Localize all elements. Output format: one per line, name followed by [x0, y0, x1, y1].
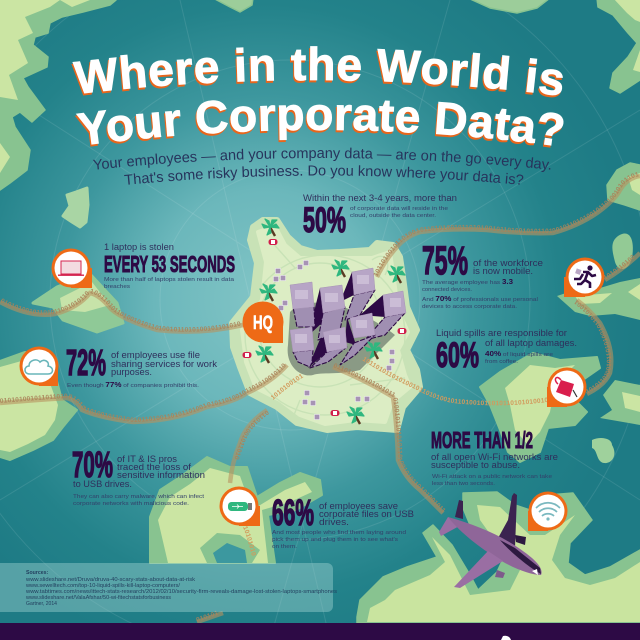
stat: Wi-Fi: Wi-Fi attack on a public network can take — [432, 474, 552, 480]
stat: 70% USB: sensitive information — [117, 470, 205, 480]
sources panel: www.slideshare.net/ValaAfshar/50-wi-fitechstatsforbusiness — [26, 595, 171, 601]
palm trees — [256, 219, 405, 424]
stat: 66% USB files: pick them up and plug them in to see what's — [272, 537, 398, 543]
stat: 72% file sharing: of employees use file — [111, 350, 200, 360]
stat: 75% mobile: And 70% of professionals use personal — [422, 296, 538, 303]
binary data trails: 1011010110101001011010100101101001011010110101010010110101001 — [362, 357, 547, 406]
island shore — [232, 220, 420, 430]
stat: 70% USB: They can also carry malware, which can infect — [73, 494, 204, 500]
stat: 75% mobile: The average employee has 3.3 — [422, 279, 513, 286]
pin: Wi-Fi icon — [528, 492, 568, 531]
sources panel: Sources: — [26, 570, 48, 576]
island roads — [245, 240, 405, 420]
stat: 70% USB: traced the loss of — [117, 462, 192, 472]
pin: runner icon — [564, 258, 604, 297]
stat: 60% liquid spills: from coffee. — [485, 359, 518, 365]
pin: USB icon — [220, 486, 260, 526]
land: bottom right — [357, 492, 640, 623]
stat: 60% liquid spills: of all laptop damages. — [485, 338, 577, 348]
stat: 66% USB files: on them. — [272, 544, 297, 550]
buildings — [290, 268, 406, 368]
land: small island right — [592, 438, 614, 463]
stat: Wi-Fi: susceptible to abuse. — [431, 460, 520, 470]
stat: 50% cloud: of corporate data will reside in the — [350, 206, 448, 212]
sources panel: www.sewelltech.com/top-10-liquid-spills-kill-laptop-computers/ — [26, 583, 181, 589]
stat: 66% USB files — [272, 492, 414, 550]
sources panel — [0, 563, 337, 612]
binary data trails: 010101 — [196, 610, 218, 622]
binary data trails: 1010110100 — [604, 254, 634, 280]
binary data trails: 0101010010110110100101011010010110100101101001101011010010101101001011010100101101010010101101011010 — [0, 364, 286, 422]
title — [71, 46, 564, 148]
title: Where in the World is — [71, 46, 563, 98]
airplane — [439, 493, 542, 588]
stat: 75% mobile — [422, 239, 543, 310]
stat: 60% liquid spills: Liquid spills are responsible for — [436, 328, 567, 338]
pin: laptop icon — [52, 248, 92, 288]
binary data trails: 01010100101101011001010110100110101101001010110100101101010010110101001010110101101001010101101010 — [1, 289, 240, 332]
stat: 72% file sharing: Even though 77% of companies prohibit this. — [67, 382, 199, 389]
stat: stolen laptops: EVERY 53 SECONDS — [104, 251, 235, 277]
land: run island and right side — [557, 163, 640, 320]
houses — [273, 260, 395, 420]
stat: 50% cloud: 50% — [303, 201, 346, 240]
footer bar — [0, 623, 640, 640]
stat: 50% cloud — [303, 193, 457, 240]
stat: stolen laptops: 1 laptop is stolen — [104, 242, 174, 252]
pin: HQ: HQ — [253, 313, 273, 334]
land: top left — [0, 0, 116, 190]
stat: Wi-Fi: of all open Wi-Fi networks are — [431, 452, 558, 462]
stat: 70% USB: corporate networks with malicious code. — [73, 501, 189, 507]
title: Your Corporate Data? — [74, 100, 564, 148]
binary data trails: 1010110100101101010010110101001011010 — [574, 300, 612, 394]
stat: 72% file sharing — [66, 342, 218, 389]
cars — [242, 239, 406, 416]
stat: 70% USB: to USB drives. — [73, 479, 132, 489]
pin: cloud icon — [20, 346, 58, 386]
panel: central HQ island — [232, 219, 420, 430]
stat: 60% liquid spills: 60% — [436, 336, 479, 375]
stat: 70% USB: of IT & IS pros — [117, 454, 178, 464]
stat: stolen laptops: breaches — [104, 284, 130, 290]
stat: 70% USB — [72, 444, 205, 507]
binary data trails: 0110101001011010 — [235, 410, 269, 460]
land: laptop island — [33, 274, 123, 332]
stat: 72% file sharing: sharing services for work — [111, 359, 218, 369]
land: usb island — [150, 457, 322, 563]
stat: 60% liquid spills: 40% of liquid spills are — [485, 351, 553, 358]
stat: 66% USB files: of employees save — [319, 501, 398, 511]
binary data trails: 1010100101 — [270, 374, 304, 400]
stat: 70% USB: 70% — [72, 444, 113, 485]
stat: 66% USB files: corporate files on USB — [319, 509, 414, 519]
land: cloud island — [0, 352, 77, 460]
stat: 66% USB files: And most people who find them laying around — [272, 530, 406, 536]
stat: 50% cloud: Within the next 3-4 years, more than — [303, 193, 457, 203]
subtitle: That's some risky business. Do you know where your data is? — [124, 165, 524, 185]
sources panel: www.tabtimes.com/news/ittech-stats-research/2012/02/10/security-firm-reveals-damage-lost-stolen-laptops-smartphones — [26, 589, 337, 595]
binary data trails: 1011010010110100101101010010110101001011010010101101001011010100101101001010110100101101010010100110100101 — [374, 172, 639, 276]
stat: 72% file sharing: 72% — [66, 342, 106, 383]
stat: 60% liquid spills — [436, 328, 577, 375]
pin: spilled mug icon — [547, 368, 586, 407]
sources panel: www.slideshare.net/Druva/druva-40-scary-stats-about-data-at-risk — [26, 577, 195, 583]
subtitle — [92, 148, 550, 185]
stat: Wi-Fi: less than two seconds. — [432, 481, 495, 487]
island interior — [242, 226, 410, 424]
binary data trails: 10101010 — [243, 526, 256, 556]
stat: 75% mobile: is now mobile. — [473, 266, 533, 276]
stat: stolen laptops: More than half of laptops stolen result in data — [104, 277, 235, 283]
land: top edge islands — [213, 0, 550, 13]
sources panel: Gartner, 2014 — [26, 601, 57, 607]
stat: 75% mobile: of the workforce — [473, 258, 543, 268]
stat: 66% USB files: drives. — [319, 517, 349, 527]
stat: 75% mobile: 75% — [422, 239, 468, 283]
land: top right — [597, 0, 640, 93]
stat: Wi-Fi — [431, 427, 558, 487]
land: small island left — [63, 188, 88, 227]
stat: Wi-Fi: MORE THAN 1/2 — [431, 427, 533, 453]
building shadow — [288, 303, 395, 375]
stat: 75% mobile: connected devices. — [422, 287, 472, 293]
stat: 66% USB files: 66% — [272, 492, 314, 533]
stat: 50% cloud: cloud, outside the data center. — [350, 213, 436, 219]
stat: 75% mobile: devices to access corporate data. — [422, 304, 517, 310]
land: mug island — [480, 353, 640, 462]
stat: stolen laptops — [104, 242, 235, 290]
stat: 72% file sharing: purposes. — [111, 367, 152, 377]
subtitle: Your employees — and your company data — are on the go every day. — [92, 148, 550, 172]
binary data trails: 01101001010100101101001011010101101001010110101001011010101 — [334, 363, 446, 513]
pin: HQ — [242, 302, 284, 343]
